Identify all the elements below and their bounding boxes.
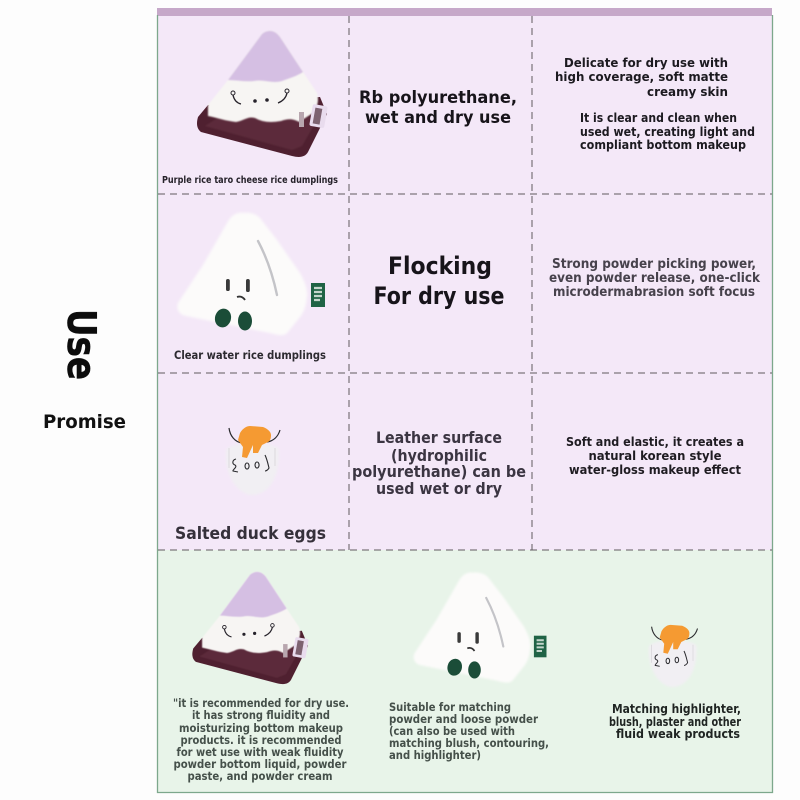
- icon: egg puff: [226, 426, 280, 495]
- text: egg benefits: natural korean style: [588, 448, 722, 463]
- text: taro recommendation: "it is recommended for dry use.: [173, 696, 349, 710]
- text: egg benefits: Soft and elastic, it creates a: [566, 434, 744, 449]
- text: egg benefits: water-gloss makeup effect: [569, 462, 741, 477]
- text: taro recommendation: [173, 696, 349, 783]
- panel: recommendations: [173, 572, 741, 783]
- text: taro recommendation: it has strong fluidity and: [192, 708, 330, 722]
- icon: taro puff small: [192, 572, 309, 684]
- heading: leather surface: (hydrophilic: [391, 446, 487, 465]
- text: egg recommendation: fluid weak products: [616, 727, 740, 741]
- heading: taro material: [359, 88, 517, 128]
- text: taro recommendation: products. it is recommended: [180, 733, 342, 747]
- text: taro benefits: used wet, creating light and: [580, 124, 755, 139]
- heading: leather surface: polyurethane) can be: [352, 462, 526, 481]
- heading: taro material: wet and dry use: [365, 108, 511, 128]
- heading: flocking: For dry use: [374, 282, 504, 310]
- text: egg recommendation: blush, plaster and other: [609, 715, 741, 729]
- text: taro benefits: compliant bottom makeup: [580, 137, 746, 152]
- caption: egg: Salted duck eggs: [175, 524, 326, 544]
- row: clear water rice dumpling: [174, 213, 760, 362]
- text: rice recommendation: and highlighter): [389, 748, 481, 762]
- heading: leather surface: used wet or dry: [376, 479, 502, 498]
- heading: Use: Use: [58, 309, 103, 380]
- panel: comparison table background: [157, 8, 772, 792]
- text: egg recommendation: [609, 702, 741, 741]
- icon: taro puff: [197, 31, 328, 157]
- caption: rice: Clear water rice dumplings: [174, 348, 326, 362]
- heading: Promise: Promise: [43, 411, 126, 433]
- heading: flocking: Flocking: [388, 252, 492, 280]
- heading: leather surface: Leather surface: [376, 428, 502, 447]
- text: egg recommendation: Matching highlighter,: [612, 702, 741, 716]
- heading: leather surface: [352, 428, 526, 498]
- text: egg benefits: [566, 434, 744, 477]
- text: rice recommendation: [389, 700, 549, 762]
- text: taro benefits: It is clear and clean when: [580, 110, 737, 125]
- caption: taro: Purple rice taro cheese rice dumplings: [162, 175, 338, 186]
- row: salted duck egg: [175, 426, 744, 544]
- text: taro benefits: [555, 55, 755, 152]
- text: taro benefits: Delicate for dry use with: [564, 55, 728, 70]
- text: taro recommendation: for wet use with weak fluidity: [176, 745, 344, 759]
- heading: flocking: [374, 252, 504, 310]
- icon: egg puff small: [649, 625, 698, 687]
- icon: rice puff small: [414, 572, 546, 683]
- text: flocking benefits: Strong powder picking power,: [552, 257, 756, 272]
- text: flocking benefits: even powder release, one-click: [549, 271, 760, 286]
- text: rice recommendation: Suitable for matching: [389, 700, 511, 714]
- text: rice recommendation: (can also be used with: [389, 724, 515, 738]
- text: taro recommendation: powder bottom liquid, powder: [174, 757, 347, 771]
- text: taro recommendation: paste, and powder cream: [188, 769, 333, 783]
- text: flocking benefits: microdermabrasion soft focus: [553, 285, 755, 300]
- text: rice recommendation: matching blush, contouring,: [389, 736, 549, 750]
- text: rice recommendation: powder and loose powder: [389, 712, 538, 726]
- text: flocking benefits: [549, 257, 760, 300]
- heading: taro material: Rb polyurethane,: [359, 88, 517, 108]
- text: taro benefits: high coverage, soft matte: [555, 69, 728, 84]
- text: taro recommendation: moisturizing bottom makeup: [179, 721, 343, 735]
- text: taro benefits: creamy skin: [647, 84, 728, 99]
- icon: white rice puff: [177, 213, 325, 335]
- row: purple rice taro dumpling: [162, 31, 755, 186]
